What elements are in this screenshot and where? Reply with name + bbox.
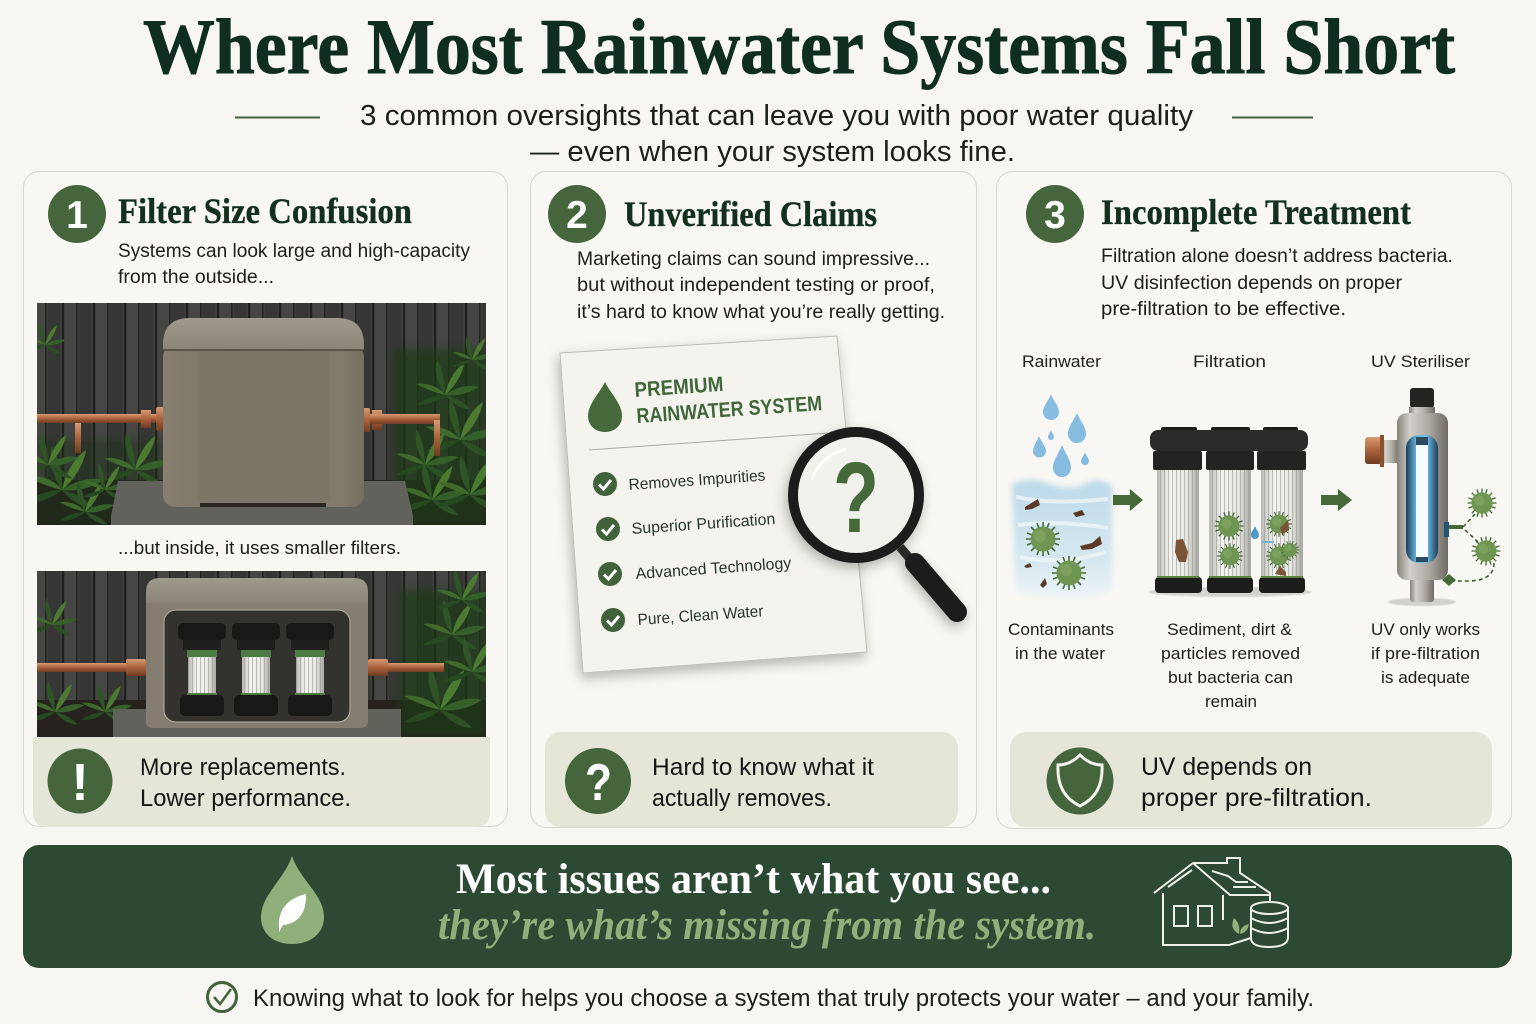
heading: filter size confusion: Filter Size Confusion bbox=[118, 191, 412, 231]
stage captions: remain bbox=[1205, 692, 1257, 711]
claim list: Pure, Clean Water bbox=[637, 603, 765, 629]
intro text: but without independent testing or proof, bbox=[577, 275, 935, 296]
banner message: Most issues aren’t what you see... bbox=[456, 856, 1051, 903]
icon: magnifying glass bbox=[793, 432, 957, 612]
brochure heading: PREMIUM bbox=[634, 373, 724, 402]
title: Where Most Rainwater Systems Fall Short bbox=[143, 3, 1455, 90]
stage labels: Filtration bbox=[1193, 352, 1266, 371]
intro text: Systems can look large and high-capacity bbox=[118, 241, 470, 262]
intro text: Marketing claims can sound impressive... bbox=[577, 249, 930, 270]
icon: warning bbox=[48, 748, 112, 814]
stage captions: if pre-filtration bbox=[1371, 644, 1480, 663]
intro text: from the outside... bbox=[118, 267, 274, 288]
illustration: contaminated rainwater bbox=[1012, 394, 1112, 598]
callout: hard to know: Hard to know what it bbox=[652, 754, 874, 781]
claim list bbox=[593, 467, 792, 632]
callout: hard to know: actually removes. bbox=[652, 785, 832, 812]
illustration: three-stage filters bbox=[1148, 427, 1312, 597]
footer message: Knowing what to look for helps you choose a system that truly protects your water – and your family. bbox=[253, 985, 1314, 1012]
stage captions: Contaminants bbox=[1008, 620, 1114, 639]
stage captions: in the water bbox=[1015, 644, 1105, 663]
banner message: they’re what’s missing from the system. bbox=[438, 902, 1096, 949]
claim list: Removes Impurities bbox=[628, 467, 766, 494]
intro text: Filtration alone doesn’t address bacteria. bbox=[1101, 246, 1453, 267]
brochure heading: RAINWATER SYSTEM bbox=[636, 392, 823, 428]
step number 2 bbox=[548, 185, 606, 243]
photo: opened housing with small filters bbox=[30, 569, 506, 737]
icon: footer check bbox=[208, 982, 236, 1012]
subtitle bbox=[235, 100, 1313, 168]
step number 3 bbox=[1026, 185, 1084, 243]
banner message bbox=[438, 856, 1096, 949]
heading: incomplete treatment: Incomplete Treatment bbox=[1101, 192, 1411, 232]
intro text bbox=[118, 241, 470, 288]
intro text bbox=[577, 249, 945, 323]
intro text bbox=[1101, 246, 1453, 320]
panel: incomplete treatment bbox=[996, 172, 1512, 828]
icon: magnifying glass: ? bbox=[833, 442, 879, 554]
callout: UV depends: UV depends on bbox=[1141, 753, 1312, 781]
step number 1 bbox=[48, 185, 106, 243]
step number 1: 1 bbox=[66, 194, 88, 237]
stage captions: Sediment, dirt & bbox=[1167, 620, 1293, 639]
stage labels bbox=[1022, 352, 1470, 371]
callout: more replacements: Lower performance. bbox=[140, 785, 351, 812]
intro text: UV disinfection depends on proper bbox=[1101, 273, 1403, 294]
step number 3: 3 bbox=[1044, 194, 1066, 237]
subtitle: — even when your system looks fine. bbox=[530, 136, 1015, 168]
photo: closed outdoor filter housing bbox=[21, 303, 508, 525]
subtitle: 3 common oversights that can leave you with poor water quality bbox=[360, 100, 1194, 132]
stage captions: but bacteria can bbox=[1168, 668, 1293, 687]
callout: more replacements bbox=[33, 737, 490, 827]
icon: brochure drop bbox=[588, 382, 622, 432]
stage captions bbox=[1008, 620, 1480, 711]
icon: shield bbox=[1046, 748, 1114, 814]
claim list: Advanced Technology bbox=[635, 555, 792, 583]
icon: question: ? bbox=[585, 754, 612, 812]
icon: warning: ! bbox=[71, 754, 89, 812]
banner bbox=[23, 845, 1512, 968]
arrow: to filtration bbox=[1113, 489, 1143, 511]
callout: UV depends bbox=[1010, 732, 1492, 827]
icon: house and rain tank bbox=[1154, 858, 1288, 947]
stage captions: UV only works bbox=[1371, 620, 1480, 639]
callout: UV depends: proper pre-filtration. bbox=[1141, 784, 1372, 812]
stage labels: Rainwater bbox=[1022, 352, 1101, 371]
caption: smaller filters: ...but inside, it uses smaller filters. bbox=[118, 538, 401, 558]
claim list: Superior Purification bbox=[631, 511, 776, 538]
arrow: to UV steriliser bbox=[1321, 489, 1352, 511]
illustration: UV steriliser bbox=[1365, 388, 1500, 606]
step number 2: 2 bbox=[566, 194, 588, 237]
brochure heading bbox=[634, 373, 823, 428]
brochure sheet bbox=[560, 336, 867, 673]
callout: more replacements: More replacements. bbox=[140, 754, 346, 781]
callout: hard to know bbox=[545, 732, 958, 827]
stage captions: is adequate bbox=[1381, 668, 1470, 687]
intro text: pre-filtration to be effective. bbox=[1101, 299, 1346, 320]
stage captions: particles removed bbox=[1161, 644, 1300, 663]
stage labels: UV Steriliser bbox=[1371, 352, 1470, 371]
icon: leaf drop bbox=[261, 856, 324, 944]
heading: unverified claims: Unverified Claims bbox=[624, 194, 877, 234]
intro text: it’s hard to know what you’re really getting. bbox=[577, 302, 945, 323]
panel: unverified claims bbox=[530, 172, 976, 828]
icon: question bbox=[565, 748, 631, 814]
panel: filter size confusion bbox=[21, 172, 508, 827]
